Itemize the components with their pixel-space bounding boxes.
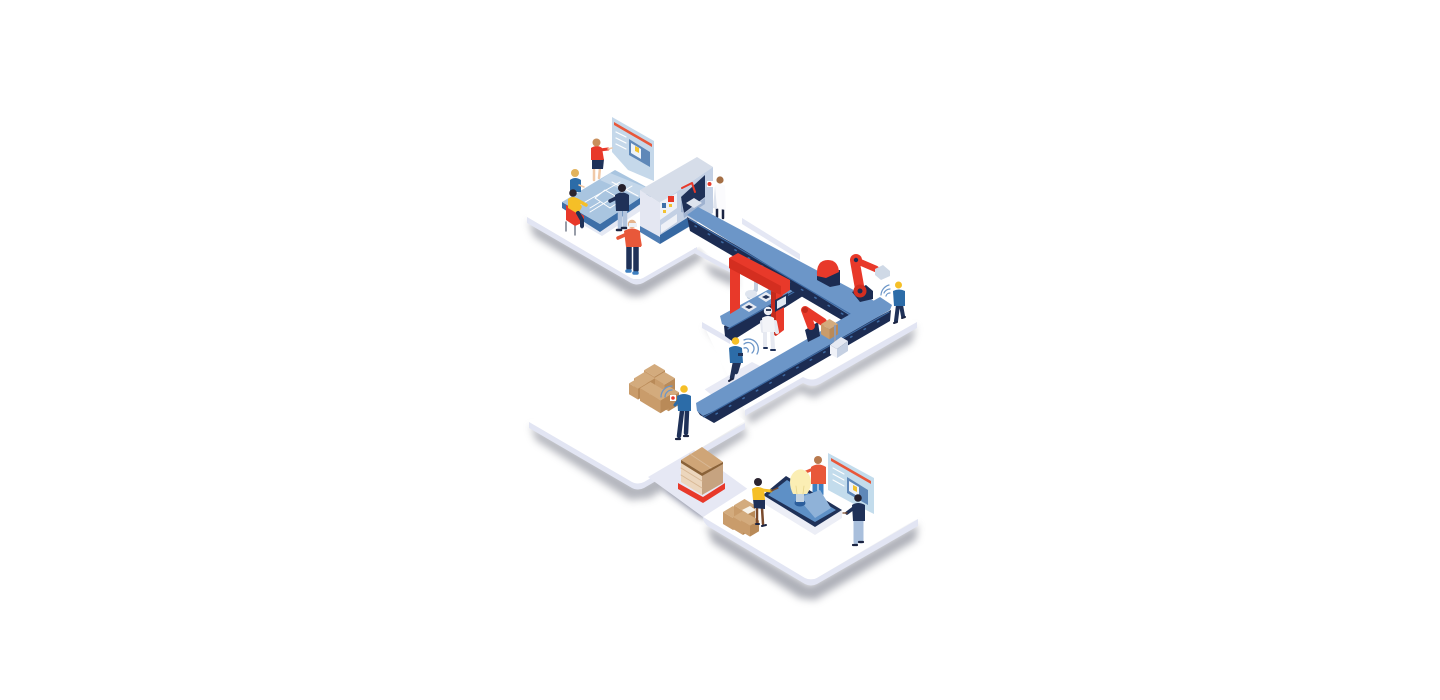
red dome machine: [817, 260, 840, 287]
platform: pallet pad: [648, 450, 749, 518]
person: seated man in yellow on red chair: [566, 189, 586, 235]
person: man in orange behind tablet: [802, 456, 826, 496]
parts on side conveyor: [741, 280, 774, 312]
robot arm: large red: [850, 254, 890, 302]
wifi signal near centre worker: [744, 339, 758, 354]
wall screen: design dashboard: [612, 117, 654, 181]
person: woman in yellow: [752, 478, 778, 526]
pallet with goods: [678, 447, 725, 503]
person: man in navy beside tablet: [843, 494, 865, 545]
platform: warehouse lower left: [529, 378, 746, 500]
robot arm: pick and place: [802, 307, 838, 342]
box stack: [629, 364, 679, 413]
person: centre worker with hard hat: [729, 337, 743, 381]
conveyor: side branch: [720, 276, 805, 341]
wifi signal near right worker: [881, 285, 890, 296]
icon: light bulb: [790, 469, 811, 506]
person: woman in blue: [570, 169, 584, 192]
conveyor: main lower arm: [696, 297, 892, 423]
machine: CNC station: [640, 157, 713, 244]
person: warehouse worker scanning: [670, 385, 691, 439]
person: man in navy at table: [610, 184, 629, 230]
cardboard boxes lower right: [723, 499, 759, 537]
wifi signal on box stack: [661, 386, 672, 397]
platform: design area top left: [527, 160, 745, 296]
platform: ideation lower right: [703, 455, 918, 600]
conveyor: main upper arm: [687, 207, 880, 326]
platform: production line middle right: [694, 218, 917, 424]
person: man in orange with VR headset: [618, 220, 641, 273]
tablet with light bulb: [763, 469, 842, 535]
control cabinet: [830, 337, 848, 358]
person: technician in white coat: [713, 176, 726, 218]
person: right worker with hard hat: [893, 282, 905, 323]
humanoid robot: [762, 307, 777, 350]
wall screen: ideas dashboard: [828, 453, 874, 514]
person: woman in red presenting: [591, 138, 612, 180]
red gantry: [729, 253, 790, 336]
design table with blueprint: [562, 170, 652, 236]
